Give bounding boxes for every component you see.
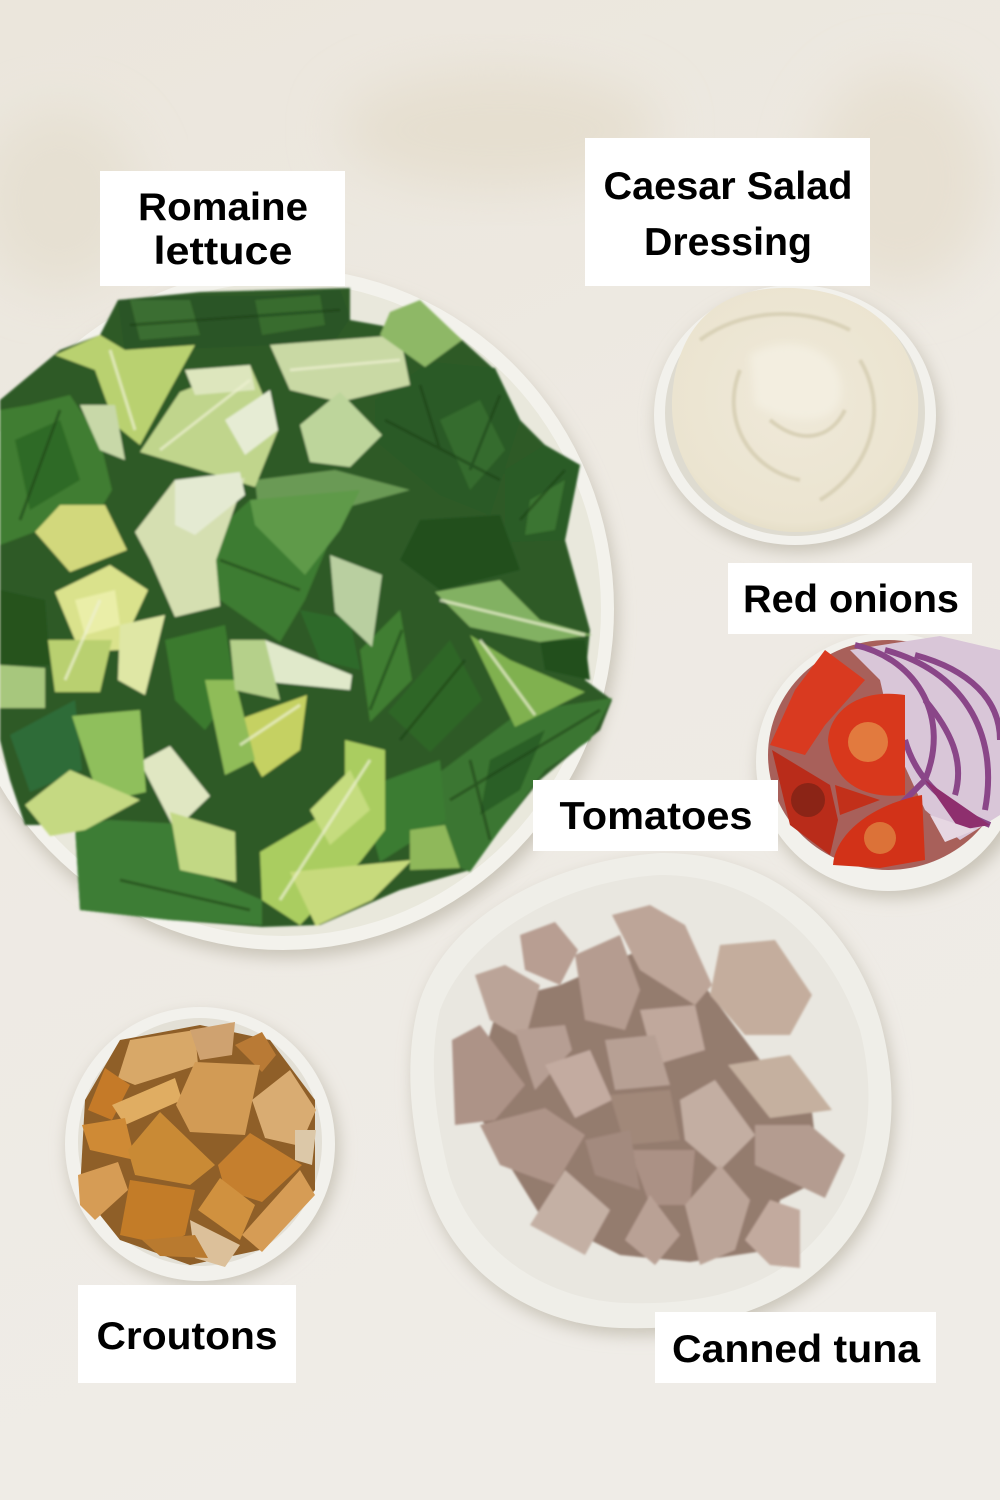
tuna chunks	[452, 905, 845, 1268]
croutons bowl	[65, 1007, 339, 1286]
croutons	[78, 1022, 316, 1267]
lettuce bowl	[0, 268, 618, 958]
label: Canned tuna: Canned tuna	[672, 1328, 920, 1371]
label: Red onions	[728, 563, 972, 634]
label: Tomatoes: Tomatoes	[560, 795, 752, 838]
light leaves	[55, 335, 195, 445]
label: Red onions: Red onions	[743, 578, 959, 621]
label: Caesar Salad Dressing	[585, 138, 870, 286]
tuna plate	[410, 853, 895, 1335]
label: Romaine lettuce	[100, 171, 345, 286]
label: Canned tuna	[655, 1312, 936, 1383]
tomatoes	[770, 650, 925, 868]
label: Romaine lettuce: lettuce	[154, 230, 292, 273]
onion and tomato bowl	[756, 633, 1000, 898]
label: Croutons: Croutons	[96, 1315, 278, 1358]
label: Caesar Salad Dressing: Caesar Salad	[604, 165, 852, 208]
dressing bowl	[654, 285, 940, 552]
red onion	[850, 636, 1000, 842]
dark leaves	[118, 290, 350, 352]
caesar dressing	[672, 288, 918, 532]
label: Tomatoes	[533, 780, 778, 851]
label: Romaine lettuce: Romaine	[138, 186, 308, 229]
label: Caesar Salad Dressing: Dressing	[644, 221, 812, 264]
label: Croutons	[78, 1285, 296, 1383]
lettuce pile	[0, 288, 612, 927]
leaf veins	[20, 310, 600, 910]
